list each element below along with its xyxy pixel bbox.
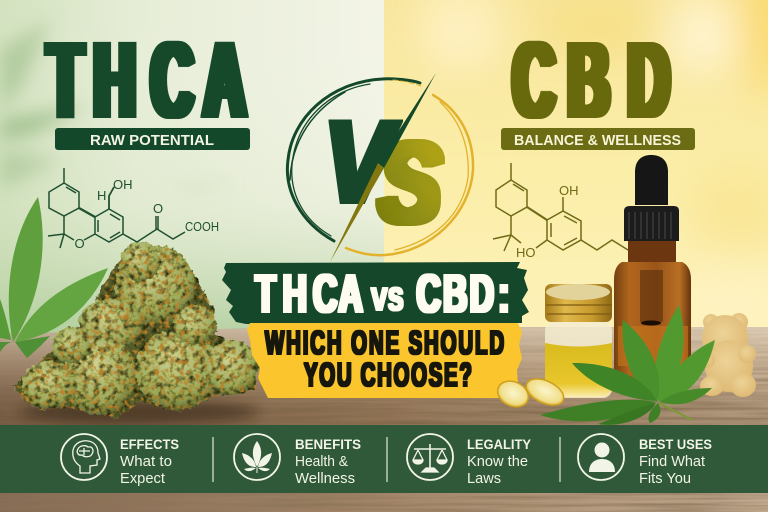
cannabis leaf: right [540, 305, 715, 425]
icon: scales [407, 434, 453, 480]
VS emblem [287, 73, 473, 262]
effects text: EFFECTS [120, 436, 179, 452]
effects text: What to [120, 454, 172, 470]
THCA molecule diagram: COOH [185, 219, 219, 234]
CBD molecule diagram: OH [559, 183, 578, 198]
background: THCA side [0, 0, 385, 340]
benefits text [295, 436, 361, 487]
feature: legality [407, 434, 532, 487]
wooden table [0, 327, 768, 512]
THCA molecule diagram [48, 168, 219, 251]
benefits text: BENEFITS [295, 436, 361, 452]
benefits text: Health & [295, 454, 348, 470]
softgel capsules [493, 374, 568, 412]
headline banner: THCA vs CBD: vs [371, 272, 404, 319]
best uses text: BEST USES [639, 436, 712, 452]
headline banner: question: WHICH ONE SHOULD [265, 324, 506, 361]
icon: leaf [234, 434, 280, 480]
CBD heading: CBD [513, 21, 669, 141]
best uses text: Fits You [639, 471, 691, 487]
bottom feature band [0, 425, 768, 493]
cannabis bud [14, 242, 258, 418]
gummy bear [699, 313, 756, 397]
legality text: LEGALITY [467, 436, 532, 452]
effects text: Expect [120, 471, 165, 487]
headline banner: THCA vs CBD: THCA [255, 263, 363, 324]
benefits text: Wellness [295, 471, 355, 487]
THCA tagline pill: RAW POTENTIAL [90, 132, 214, 149]
letter S: S [379, 120, 441, 247]
CBD molecule diagram: HO [516, 245, 536, 260]
best uses text: Find What [639, 454, 705, 470]
bud shadow on table [20, 400, 260, 424]
headline banner: THCA vs CBD [222, 262, 529, 324]
CBD molecule diagram [493, 163, 628, 260]
amber dropper bottle [614, 155, 691, 388]
letter V: V [324, 95, 400, 229]
feature: best uses [578, 434, 712, 487]
icon: person [578, 434, 624, 480]
feature: effects [61, 434, 179, 487]
legality text [467, 436, 532, 487]
THCA heading: THCA [48, 21, 245, 141]
headline banner: THCA vs CBD: CBD: [417, 263, 509, 324]
THCA tagline pill [55, 128, 250, 150]
ring: gold half [346, 80, 473, 255]
best uses text [639, 436, 712, 487]
effects text [120, 436, 179, 487]
THCA molecule diagram: OH [113, 177, 132, 192]
icon: brain in head [61, 434, 107, 480]
background: CBD side [384, 0, 768, 340]
THCA molecule diagram: O [153, 201, 163, 216]
THCA molecule diagram: O [74, 236, 85, 251]
slash [330, 73, 436, 262]
headline banner: question [247, 323, 522, 398]
feature: benefits [234, 434, 361, 487]
legality text: Laws [467, 471, 501, 487]
ring: green half [287, 79, 420, 241]
oil jar [545, 284, 612, 398]
THCA molecule diagram: H [97, 188, 106, 203]
legality text: Know the [467, 454, 528, 470]
cannabis leaf: left [0, 197, 108, 358]
headline banner: question: YOU CHOOSE? [304, 356, 473, 393]
CBD tagline pill: BALANCE & WELLNESS [514, 132, 681, 149]
